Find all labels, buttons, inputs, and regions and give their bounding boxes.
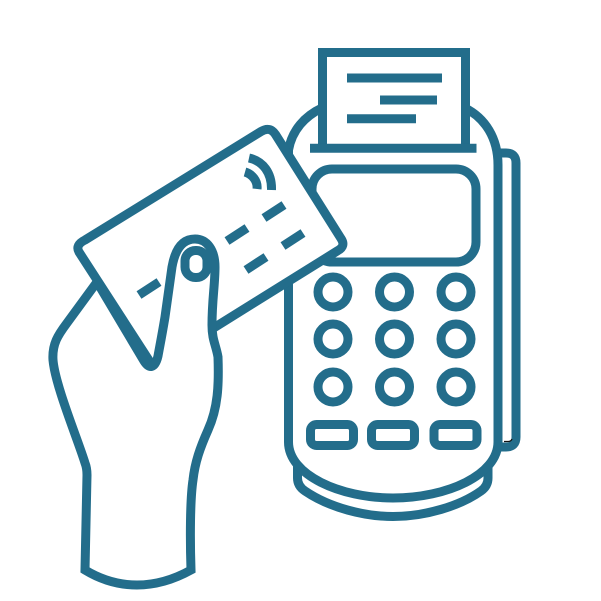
- terminal side panel: [498, 153, 516, 447]
- terminal base: [298, 463, 488, 516]
- fingernail: [185, 250, 207, 278]
- contactless symbol: [245, 158, 272, 190]
- receipt: [310, 52, 476, 148]
- credit card: [78, 129, 343, 365]
- terminal body: [288, 108, 498, 498]
- card number dashes: [139, 205, 303, 295]
- function buttons: [310, 424, 477, 446]
- keypad: [318, 277, 471, 402]
- hand with finger on card: [53, 239, 218, 585]
- terminal screen: [312, 169, 476, 262]
- small dark notch on side panel: [504, 439, 512, 442]
